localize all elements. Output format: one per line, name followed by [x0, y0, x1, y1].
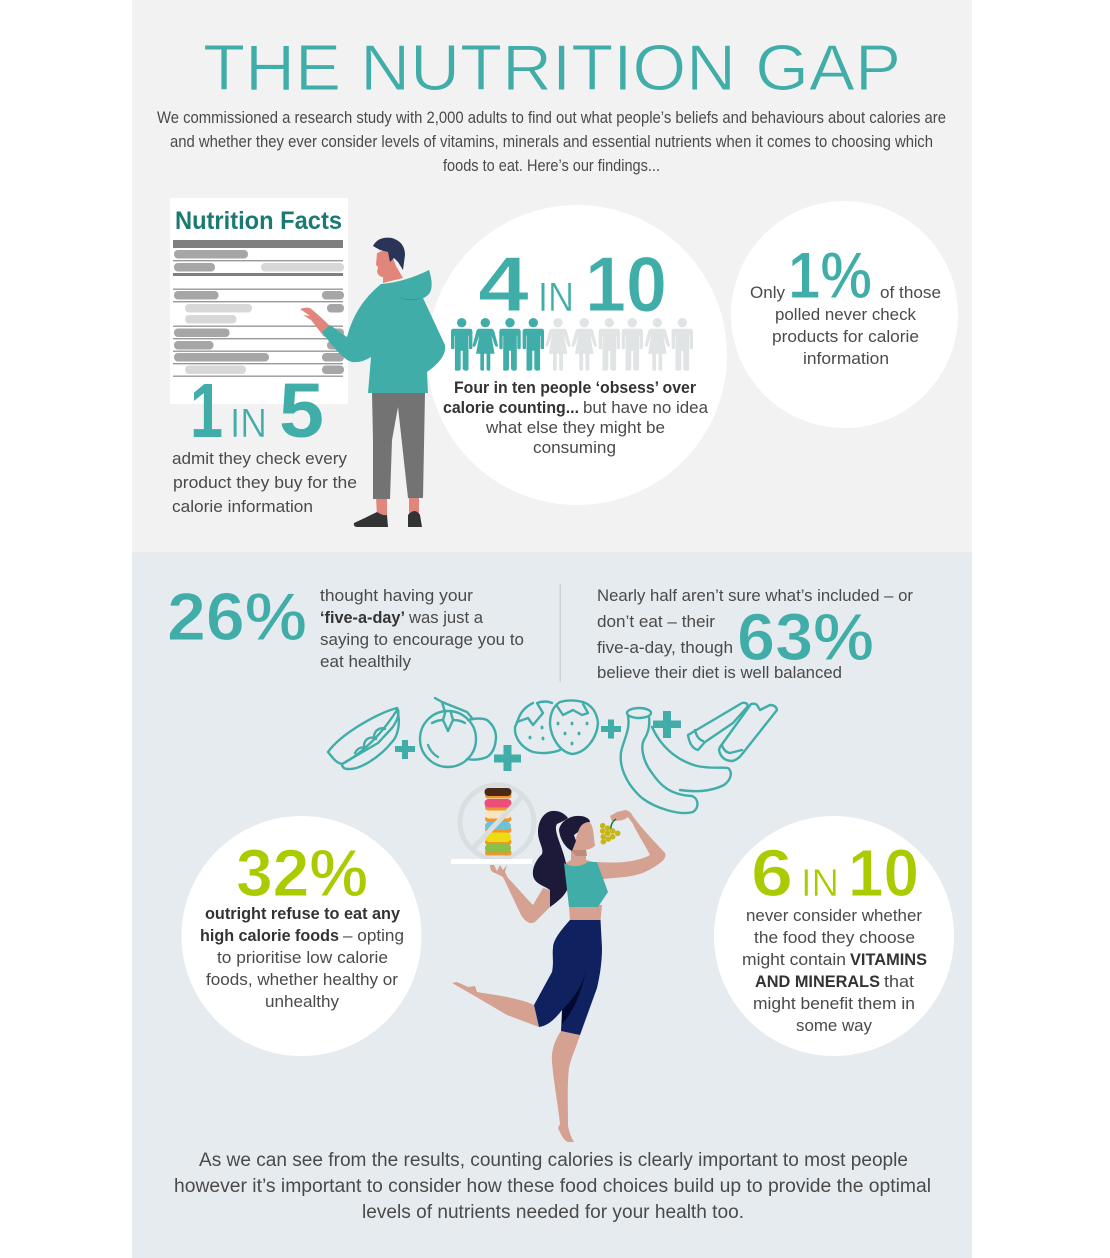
stat: 1 in 5 [190, 368, 324, 454]
conclusion text: As we can see from the results, counting calories is clearly important to most people [199, 1150, 908, 1171]
arm eating grapes [597, 810, 665, 879]
icon: bananas [621, 708, 731, 813]
illustration: woman eating grapes [451, 810, 665, 1142]
text: 26 percent description: thought having your [320, 587, 474, 605]
intro text: and whether they ever consider levels of vitamins, minerals and essential nutrients when it comes to choosing which [170, 133, 933, 151]
arm holding plate [490, 865, 550, 923]
stat: 1 percent: products for calorie [772, 328, 919, 346]
illustration: man in hoodie [300, 238, 445, 527]
stat: 4 in 10 [478, 240, 667, 328]
icon: plus [653, 711, 681, 738]
icon: plus [395, 740, 415, 759]
conclusion text: levels of nutrients needed for your health too. [362, 1202, 744, 1223]
text: 1 in 5 description [172, 450, 357, 516]
stat: 1 percent: information [803, 350, 889, 368]
text: 1 in 5 description: calorie information [172, 498, 313, 516]
text: 26 percent description [320, 587, 524, 671]
icon: celery [688, 703, 777, 761]
text: 4 in 10 description: Four in ten people ‘obsess’ over [454, 379, 697, 397]
text: 6 in 10 description: might benefit them in [753, 995, 915, 1013]
intro text: We commissioned a research study with 2,000 adults to find out what people’s beliefs and behaviours about calories are [157, 109, 946, 127]
stat: 26 percent: 26% [167, 579, 307, 655]
stat: 32 percent: 32% [236, 836, 368, 911]
neck [564, 845, 597, 868]
panel: bottom section background [132, 552, 972, 1258]
text: 4 in 10 description: what else they might be [485, 419, 665, 437]
text: 6 in 10 description: some way [796, 1017, 873, 1035]
stat: 6 in 10: 10 [848, 836, 919, 911]
text: 4 in 10 description: consuming [533, 439, 616, 457]
conclusion text: however it’s important to consider how these food choices build up to provide the optimal [174, 1176, 931, 1197]
circle: 6 in 10 [714, 816, 954, 1056]
face [574, 821, 595, 850]
text: 6 in 10 description: might contain [742, 951, 846, 969]
text: 6 in 10 description: the food they choose [754, 929, 915, 947]
circle: 1% [731, 201, 958, 428]
icon: strawberries [515, 700, 598, 754]
text: 4 in 10 description [443, 379, 709, 457]
text: 63 percent description: Nearly half aren’t sure what’s included – or [597, 587, 914, 605]
stat: 1 percent [750, 238, 941, 368]
stat: 6 in 10: IN [801, 862, 839, 905]
stat: 4 in 10: 4 [478, 240, 529, 328]
text: 32 percent description: to prioritise low calorie [217, 949, 388, 967]
stat: 6 in 10 [751, 836, 919, 911]
icon: plus [601, 720, 621, 738]
icon: pea pod [328, 708, 399, 769]
stat: 1 in 5: IN [230, 400, 267, 446]
panel: top section background [132, 0, 972, 552]
midriff [569, 905, 602, 921]
text: 4 in 10 description: calorie counting... [443, 399, 579, 417]
text: 6 in 10 description [742, 907, 927, 1035]
stat: 1 in 5: 1 [190, 368, 223, 454]
circle: 4 in 10 [427, 205, 727, 505]
icon: crossed-out donut stack [460, 785, 534, 859]
text: 6 in 10 description: VITAMINS [850, 951, 927, 969]
text: 6 in 10 description: AND MINERALS [755, 973, 880, 991]
ponytail [533, 811, 568, 907]
standing leg [552, 1031, 580, 1142]
circle: 32 percent [182, 816, 422, 1056]
stat: 1 percent: polled never check [775, 306, 917, 324]
icon: plus [494, 745, 521, 771]
text: 63 percent description: don’t eat – their [597, 613, 716, 631]
text: 1 in 5 description: product they buy for the [173, 474, 357, 492]
text: 32 percent description: unhealthy [265, 993, 340, 1011]
panel: nutrition facts label [170, 198, 348, 404]
text: 6 in 10 description: never consider whether [746, 907, 923, 925]
text: 32 percent description: – opting [343, 927, 404, 945]
grapes [600, 823, 620, 844]
text: 26 percent description: saying to encourage you to [320, 631, 524, 649]
icon: tomatoes [420, 698, 496, 767]
stat: 1 in 5: 5 [279, 368, 324, 454]
text: 32 percent description [200, 905, 404, 1011]
text: 63 percent description: five-a-day, though [597, 639, 733, 657]
text: 32 percent description: outright refuse to eat any [205, 905, 401, 923]
panel: nutrition facts label: Nutrition Facts [175, 207, 342, 235]
stat: 1 percent: of those [880, 284, 941, 302]
intro text: foods to eat. Here’s our findings... [443, 157, 660, 175]
stat: 4 in 10: 10 [585, 240, 667, 328]
text: 26 percent description: eat healthily [320, 653, 412, 671]
conclusion text [174, 1150, 931, 1223]
title: THE NUTRITION GAP [203, 31, 901, 104]
text: 32 percent description: foods, whether healthy or [206, 971, 399, 989]
crop top [564, 862, 608, 907]
stat: 6 in 10: 6 [751, 836, 793, 911]
head hair [559, 816, 590, 851]
stat: 1 percent: 1% [788, 238, 872, 312]
shorts [534, 920, 602, 1035]
stat: 4 in 10: IN [538, 274, 574, 320]
text: 32 percent description: high calorie foods [200, 927, 339, 945]
text: 26 percent description: was just a [408, 609, 484, 627]
stat: 1 percent: Only [750, 284, 786, 302]
text: 63 percent description [597, 587, 914, 682]
intro text [157, 109, 946, 175]
stat: 63 percent: 63% [737, 600, 874, 675]
text: 63 percent description: believe their diet is well balanced [597, 664, 842, 682]
text: 6 in 10 description: that [884, 973, 914, 991]
icon row: ten people, four highlighted [451, 318, 693, 371]
text: 1 in 5 description: admit they check every [172, 450, 348, 468]
text: 26 percent description: ‘five-a-day’ [320, 609, 405, 627]
raised leg [452, 982, 539, 1027]
text: 4 in 10 description: but have no idea [583, 399, 709, 417]
